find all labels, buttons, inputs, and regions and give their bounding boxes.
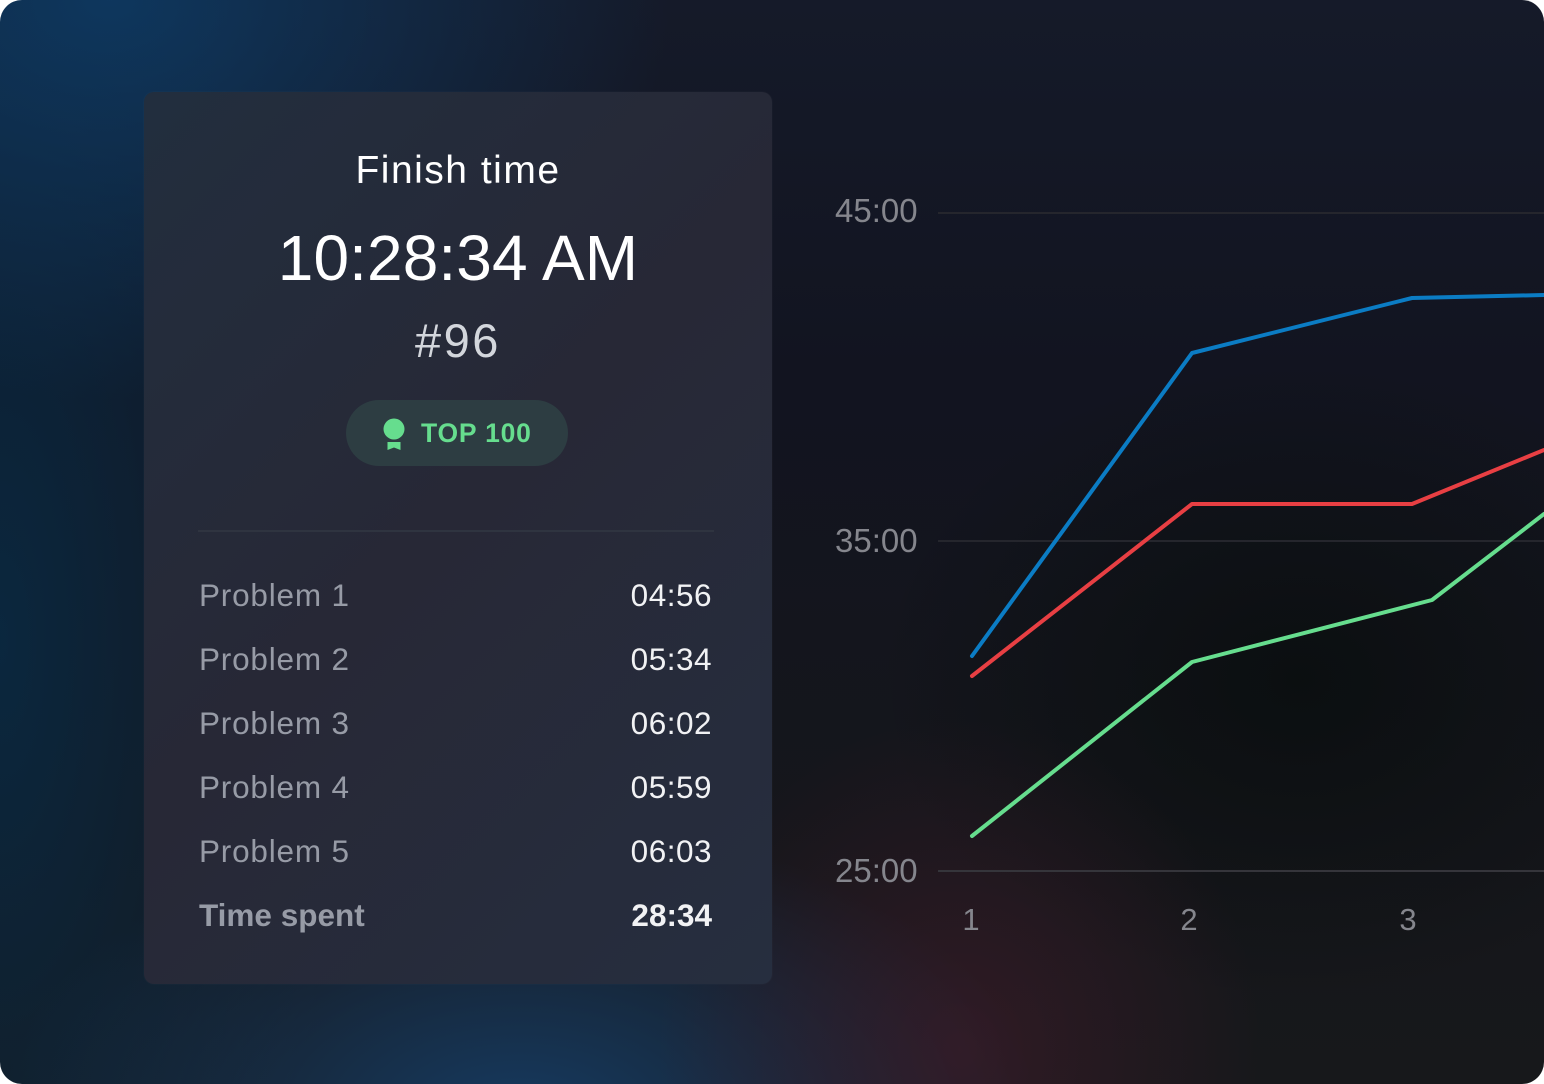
row time: problem 2: 05:34 [631, 641, 712, 677]
x axis labels: 3 [1399, 902, 1417, 937]
x axis labels [962, 902, 1417, 937]
row time: problem 5: 06:03 [631, 833, 712, 869]
row label: problem 2: Problem 2 [199, 641, 350, 677]
row time: total: 28:34 [631, 897, 712, 933]
rank: #96 [415, 314, 501, 367]
x axis labels: 2 [1180, 902, 1198, 937]
row label: problem 4: Problem 4 [199, 769, 350, 805]
row time: problem 3: 06:02 [631, 705, 712, 741]
row label: problem 1: Problem 1 [199, 577, 350, 613]
row label: time spent: Time spent [199, 897, 365, 933]
y axis labels: 45:00 [835, 192, 918, 229]
badge: top 100 [346, 400, 568, 466]
series: green line [972, 514, 1544, 836]
row label: problem 3: Problem 3 [199, 705, 350, 741]
panel: finish time card [144, 92, 772, 984]
row label: problem 5: Problem 5 [199, 833, 350, 869]
y axis labels: 25:00 [835, 852, 918, 889]
series: red line [972, 450, 1544, 676]
x axis labels: 1 [962, 902, 980, 937]
icon: medal [384, 418, 404, 450]
badge label: TOP 100 [421, 418, 532, 448]
y axis labels: 35:00 [835, 522, 918, 559]
row time: problem 4: 05:59 [631, 769, 712, 805]
y axis labels [835, 192, 918, 889]
series: blue line [972, 295, 1544, 656]
heading: finish time: Finish time [355, 149, 561, 192]
row time: problem 1: 04:56 [631, 577, 712, 613]
finish time value: 10:28:34 AM [278, 222, 638, 294]
